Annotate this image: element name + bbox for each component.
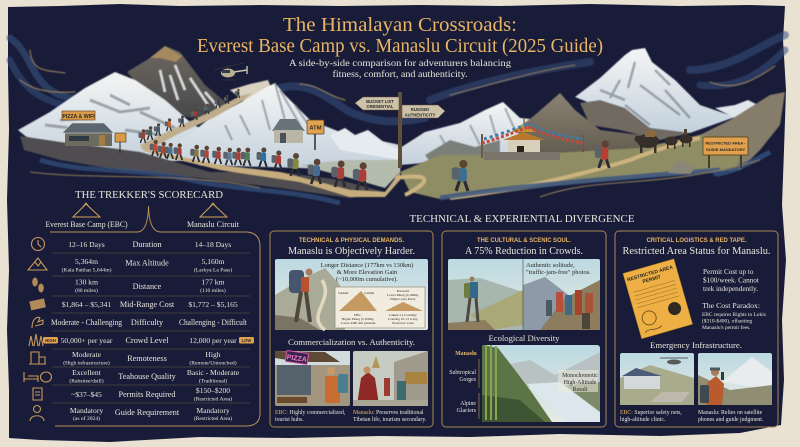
panel: technical and physical demands: Commercialization vs. Authenticity. [288,337,415,347]
illustration: yak caravan [634,129,692,153]
caption: EBC: EBC: Highly commercialized, [275,410,346,416]
caption: Manaslu [353,410,427,423]
row: max altitude [28,257,232,274]
panel: cultural and scenic soul: A 75% Reduction in Crowds. [465,246,583,257]
elevation chart: Pie.Rover votes [392,321,414,325]
eco legend [449,351,479,419]
panel: cultural and scenic soul [442,231,606,427]
panel: technical and physical demands: TECHNICAL & PHYSICAL DEMANDS. [299,237,404,244]
image: solitude vs crowd: "traffic-jam-free" photos. [526,269,591,276]
row: distance: (80 miles) [75,287,98,294]
low badge [239,337,254,344]
row: remoteness: High [205,350,221,359]
illustration: Manaslu side mountains [400,48,785,172]
row: guide requirement: Guide Requirement [115,408,180,417]
row: duration: Duration [132,240,162,249]
permit cost text: trek independently. [703,285,758,293]
row: teahouse quality: Excellent [72,368,102,377]
row: difficulty: Moderate - Challenging [51,318,122,327]
caption: Manaslu emergency: phones and guide judgment. [698,417,764,423]
row: guide requirement: (as of 2024) [73,415,100,422]
image: solitude vs crowd: Authentic solitude, [526,262,575,269]
elevation chart: Lower Pkurg (4,100m), [387,293,419,298]
row: teahouse quality: Basic - Moderate [187,368,240,377]
section heading: TECHNICAL & EXPERIENTIAL DIVERGENCE [410,214,634,225]
image: hiker on trail with elevation chart [275,259,428,330]
sign: bucket list credential: CREDENTIAL [366,104,394,109]
title [197,14,603,57]
image: guide with satellite phone [698,353,772,405]
row: guide requirement: Mandatory [70,406,103,415]
subtitle [289,58,511,80]
high badge [43,337,58,344]
column head: EBC [46,203,128,229]
row: crowd level: 50,000+ per year [61,336,113,345]
row: distance [32,278,226,294]
row: teahouse quality: (Rabsttee/dstll) [69,378,104,384]
sign: rugged authenticity: RUGGED [411,107,429,112]
row: mid-range cost [29,298,238,310]
panel: technical and physical demands: Manaslu is Objectively Harder. [288,246,415,257]
row: guide requirement [30,406,232,422]
row: guide requirement: (Restricted Area) [194,415,232,422]
illustration: Manaslu side ground [395,135,770,199]
panel: critical logistics and red tape: CRITICAL LOGISTICS & RED TAPE. [646,237,747,244]
caption: Manaslu emergency: Manaslu: Relies on satellite [698,410,763,416]
row: max altitude: (Larkya La Pass) [194,266,232,274]
elevation chart: EBC: [354,313,362,317]
image: restricted area permit document [623,259,693,339]
image: restricted area permit document: RESTRICTED AREA [627,264,674,283]
caption: EBC emergency: EBC: Superior safety nets, [620,409,682,416]
caption: EBC: tourist hubs. [275,417,304,423]
row: max altitude: Max Altitude [125,258,169,268]
row: max altitude: 5,364m [75,257,98,266]
image: restricted area permit document: PERMIT [642,274,662,285]
row: mid-range cost: Mid-Range Cost [120,300,175,309]
eco legend: Manaslu [455,351,478,357]
column head: Manaslu [187,203,240,229]
permit cost text: Permit Cost up to [703,268,754,276]
column head: EBC: Everest Base Camp (EBC) [46,220,128,229]
sign: restricted area [703,137,748,168]
caption: EBC [275,410,346,423]
sign: rugged authenticity: AUTHENTICITY [405,112,436,118]
row: distance: 130 km [75,278,98,286]
row: teahouse quality: Teahouse Quality [118,372,177,381]
eco legend: Subtropical [449,370,476,376]
caption: EBC emergency [620,409,682,423]
row: max altitude: (Kala Patthar 5,644m) [62,266,112,274]
image: river valley [482,345,600,422]
signpost [355,92,445,168]
caption: Manaslu: Manaslu: Preserves traditional [353,410,424,416]
eco legend: Alpine [460,401,476,407]
wind swirls [10,35,785,121]
cost paradox text: EBC requires Rights to Lokis [702,312,766,318]
illustration: lower trekker line [150,140,367,190]
image: monk in village [353,351,428,406]
elevation chart: 5,644m [338,291,349,296]
image: pizza storefront [275,351,350,406]
row: permits required: $150–$200 [196,386,230,395]
caption: Manaslu: Tibetan life, tourism secondary. [353,416,427,423]
elevation chart [335,287,425,328]
row: duration: 14–18 Days [195,240,231,249]
low badge: LOW [242,338,251,343]
panel: cultural and scenic soul: Ecological Diversity [489,333,560,343]
image: hiker on trail with elevation chart: & More Elevation Gain [337,269,398,276]
row: distance: Distance [133,282,162,291]
row: difficulty: Difficulty [131,318,164,327]
illustration: Everest side mountains [18,46,400,172]
row: permits required [33,386,232,402]
eco legend: Glaciers [457,408,477,414]
sign: restricted area: RESTRICTED AREA - [705,140,746,146]
elevation chart: Lower 4400 dall gainsum [341,321,376,325]
eco legend: Gorges [459,377,477,383]
row: remoteness [29,350,237,366]
row: remoteness: (Remote/Untouched) [189,360,237,366]
row: crowd level [29,334,254,346]
row: remoteness: Moderate [72,350,102,359]
elevation chart: Prevaald: [397,289,409,293]
row: permits required: Permits Required [118,390,176,399]
image: hiker on trail with elevation chart: (~10,000m cumulative). [336,276,398,283]
panel: critical logistics and red tape [615,231,778,427]
row: guide requirement: Mandatory [196,406,230,415]
elevation chart: Courting 10–15 h day. [388,317,418,321]
elevation chart: Lakkar La Courting: [389,313,417,317]
row: teahouse quality: (Traditional) [199,378,227,384]
subtitle: fitness, comfort, and authenticity. [332,69,468,80]
sign: bucket list credential [355,97,399,110]
caption: EBC emergency: high-altitude clinic. [620,417,666,423]
illustration: foreground hikers [452,140,609,191]
column head: Manaslu: Manaslu Circuit [187,220,240,229]
row: max altitude: 5,160m [202,257,225,266]
elevation chart: Higher Pkurg (5,100m), [342,317,374,322]
row: duration [32,238,231,250]
elevation chart: 5,160m [364,291,375,296]
row: teahouse quality [24,368,240,384]
sign: bucket list credential: BUCKET LIST [366,99,394,104]
illustration: ground and trail, Everest side [20,93,400,203]
sign: restricted area: GUIDE MANDATORY [706,147,745,152]
illustration: monastery with prayer flags [482,118,583,160]
permit cost text [703,268,759,293]
image: river valley: Result [573,387,588,393]
panel: technical and physical demands [270,231,433,427]
row: duration: 12–16 Days [68,240,105,249]
row: permits required: ~$37–$45 [71,390,102,399]
scorecard [24,190,260,426]
illustration: upper trekker line [138,89,240,143]
image: clinic and helipad [620,353,694,405]
image: pizza storefront: PIZZA [286,354,307,364]
caption: Manaslu emergency [698,410,764,423]
illustration: teahouse with pizza and wifi sign [62,111,126,153]
panel: critical logistics and red tape: Emergency Infrastructure. [650,340,742,350]
image: solitude vs crowd [448,259,600,330]
cost paradox text [702,301,766,331]
panel: critical logistics and red tape: Restricted Area Status for Manaslu. [622,246,770,257]
row: difficulty [32,317,248,328]
sign: pizza and wifi: PIZZA & WIFI [62,114,95,120]
row: distance: (110 miles) [200,287,226,294]
row: permits required: (Restricted Area) [194,396,232,402]
cost paradox text: The Cost Paradox: [702,301,760,310]
illustration: helicopter [214,63,247,80]
row: difficulty: Challenging - Difficult [179,318,248,327]
permit cost text: $100/week. Cannot [703,276,759,284]
row: crowd level: Crowd Level [126,336,169,345]
illustration: ATM hut and sign [272,119,324,150]
row: mid-range cost: $1,772 – $5,165 [188,300,238,309]
row: mid-range cost: $1,864 – $5,341 [62,300,111,309]
row: distance: 177 km [202,278,225,286]
image: river valley: Monochronotic [562,373,598,379]
sign: rugged authenticity [402,105,445,118]
row: crowd level: 12,000 per year [189,336,237,345]
title: Everest Base Camp vs. Manaslu Circuit (2025 Guide) [197,35,603,57]
cost paradox text: ($310-$400), offsetting [702,318,753,324]
scorecard frame [50,206,260,426]
high badge: HIGH [45,338,56,343]
panel: cultural and scenic soul: THE CULTURAL & SCENIC SOUL. [477,237,571,244]
image: hiker on trail with elevation chart: Longer Distance (177km vs 130km) [321,262,413,269]
elevation chart: Higher sony Pucer [390,297,416,301]
cost paradox text: Manaslu's permit fees. [702,324,750,331]
image: river valley: High-Altitude [564,380,597,386]
scorecard heading: THE TREKKER'S SCORECARD [75,190,224,201]
title: The Himalayan Crossroads: [283,14,517,36]
row: remoteness: Remoteness [127,354,167,363]
row: remoteness: (High infrastructure) [63,360,110,366]
subtitle: A side-by-side comparison for adventurers balancing [289,58,511,69]
sign: ATM: ATM [309,126,322,132]
